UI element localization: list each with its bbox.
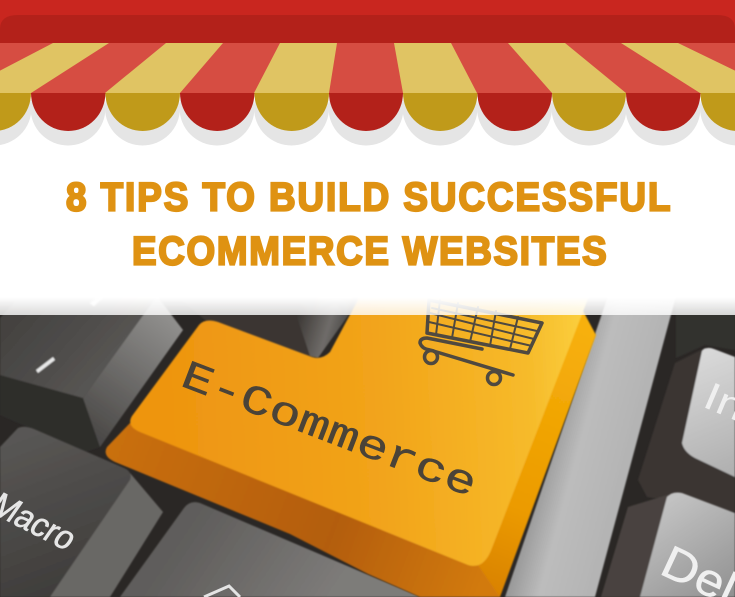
awning inner dark band: [0, 15, 735, 43]
keyboard photo: [0, 290, 735, 597]
key: ins: [638, 348, 735, 512]
awning stripes: [0, 43, 735, 94]
title: [66, 175, 670, 274]
awning: [0, 0, 735, 146]
key: bottom center: [120, 502, 420, 597]
e-commerce label: E-Commerce: [174, 354, 483, 509]
title line 1: 8 TIPS TO BUILD SUCCESSFUL: [66, 175, 670, 220]
arrow glyph: [204, 586, 240, 597]
scallop shadows: [0, 70, 735, 146]
long grey key: [505, 296, 676, 597]
key: upper right: [676, 296, 735, 358]
scallops: [0, 93, 735, 131]
key: slash: [0, 296, 183, 452]
keyboard base: [0, 290, 735, 597]
key: enter e-commerce: [106, 296, 596, 597]
cart icon: [420, 300, 542, 384]
key: upper middle: [177, 296, 362, 358]
title line 2: ECOMMERCE WEBSITES: [132, 229, 607, 274]
awning top band: [0, 0, 735, 43]
orange key top face: [130, 296, 589, 566]
key: del: [601, 492, 735, 597]
orange key front side: [106, 423, 500, 597]
key: macro: [0, 427, 163, 597]
orange key right side: [470, 296, 596, 597]
white fade over photo top: [0, 290, 735, 315]
